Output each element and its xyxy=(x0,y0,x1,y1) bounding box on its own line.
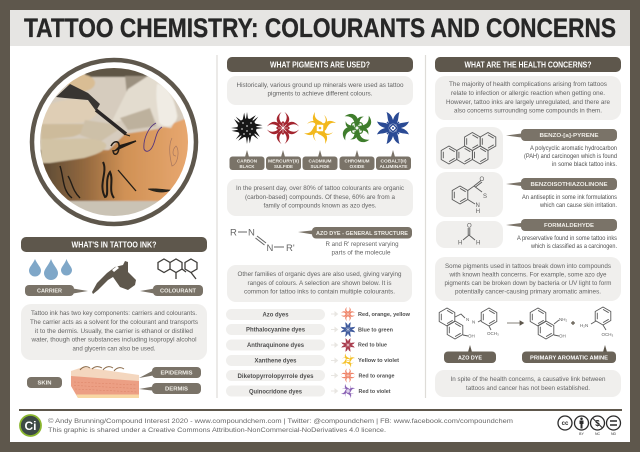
pigment labels: CADMIUM xyxy=(308,158,332,164)
photo: tattooist at work in circular frame xyxy=(32,60,196,224)
benzo-a-pyrene description: A polycyclic aromatic hydrocarbon xyxy=(530,146,617,152)
row: azo dyes: Azo dyes xyxy=(262,312,289,318)
row: quinocridone dyes: Quinocridone dyes xyxy=(249,388,302,396)
pigment labels: ALUMINATE xyxy=(380,164,408,169)
icon: tattoo machine xyxy=(92,261,136,294)
pigment labels: SULFIDE xyxy=(274,164,293,169)
skin label xyxy=(27,377,62,388)
row: quinocridone dyes: Red to violet xyxy=(358,389,391,395)
icon: creative commons licence badges xyxy=(558,416,620,436)
row: xanthene dyes: Xanthene dyes xyxy=(254,358,297,364)
icon: cadmium sulfide pigment xyxy=(304,112,336,144)
text block: ink components xyxy=(21,304,207,360)
molecule: benzisothiazolinone xyxy=(436,172,503,217)
row: xanthene dyes xyxy=(226,353,399,368)
text block: organic colourants: (carbon-based) compounds. Of these, 60% are from a xyxy=(245,195,396,201)
molecule: benzisothiazolinone: O xyxy=(480,177,484,183)
heading: what's in tattoo ink: WHAT'S IN TATTOO INK? xyxy=(72,240,157,250)
formaldehyde description: A preservative found in some tattoo inks xyxy=(517,236,617,242)
pigment labels: CHROMIUM xyxy=(344,158,370,164)
text block: health complications: also concerns surrounding some compounds in them. xyxy=(454,108,602,114)
molecule: azo dye xyxy=(439,308,499,339)
carrier label: CARRIER xyxy=(37,288,62,294)
icon: cobalt aluminate pigment xyxy=(377,112,409,144)
dermis label xyxy=(139,383,201,394)
molecule: benzo[a]pyrene xyxy=(436,127,503,169)
colourant label xyxy=(140,285,203,296)
text block: historical minerals: pigments to achieve different colours. xyxy=(268,92,373,98)
benzisothiazolinone description: which can cause skin irritation. xyxy=(539,203,617,209)
pigment labels: CARBON xyxy=(237,158,257,164)
text block: ink components: The carrier acts as a solvent for the colourant and transports xyxy=(30,320,198,326)
molecule: benzisothiazolinone: S xyxy=(483,194,487,200)
primary aromatic amine label xyxy=(522,345,616,363)
pigment labels xyxy=(230,150,411,170)
row: phthalocyanine dyes: Phthalocyanine dyes xyxy=(246,326,305,334)
text block: other organic dyes: Other families of organic dyes are also used, giving varying xyxy=(238,272,402,278)
logo: compound interest: Ci xyxy=(24,419,36,433)
molecules: breakdown products: NH₂ xyxy=(559,317,567,322)
column dividers xyxy=(217,55,426,398)
azo dye note xyxy=(326,242,398,256)
text block: azo breakdown: potentially cancer-causing primary aromatic amines. xyxy=(455,290,601,296)
molecules: breakdown products xyxy=(530,307,613,339)
molecule: azo dye: OCH₃ xyxy=(487,331,499,336)
formaldehyde label: FORMALDEHYDE xyxy=(544,223,594,229)
row: phthalocyanine dyes xyxy=(226,322,393,337)
icon: creative commons licence badges: NC xyxy=(595,432,600,436)
text block: historical minerals: Historically, various ground up minerals were used as tattoo xyxy=(236,83,404,89)
footer credits: © Andy Brunning/Compound Interest 2020 - www.compoundchem.com | Twitter: @compoundchem | FB: www.facebook.com/compoundchem xyxy=(48,417,513,425)
molecule: formaldehyde: O xyxy=(467,224,472,230)
footer rule xyxy=(19,409,622,411)
text block: ink components: water, though other substances including isopropyl alcohol xyxy=(30,338,196,344)
row: anthraquinone dyes: Red to blue xyxy=(358,342,388,348)
text block: ink components: and glycerin can also be used. xyxy=(72,346,156,352)
azo dye label xyxy=(298,227,412,238)
icon: creative commons licence badges: BY xyxy=(579,432,584,436)
azo dye general structure: R' xyxy=(286,243,295,254)
icon: colourant molecule xyxy=(158,259,197,279)
row: anthraquinone dyes xyxy=(226,338,388,352)
icon: creative commons licence badges: cc xyxy=(562,421,569,427)
colourant label: COLOURANT xyxy=(160,288,197,294)
pigment labels: MERCURY(II) xyxy=(268,158,300,164)
text block: causative link xyxy=(435,370,621,397)
benzo-a-pyrene description: in some black tattoo inks. xyxy=(552,162,617,168)
heading: what pigments are used xyxy=(227,57,413,72)
pigment labels: OXIDE xyxy=(350,164,365,169)
logo: compound interest xyxy=(20,415,41,436)
footer credits: This graphic is shared under a Creative Commons Attribution-NonCommercial-NoDerivatives 4.0 licence. xyxy=(48,427,386,434)
text block: health complications xyxy=(435,76,621,120)
benzisothiazolinone label xyxy=(506,178,617,190)
dermis label: DERMIS xyxy=(165,386,188,392)
molecules: breakdown products: H₂N xyxy=(580,323,588,328)
skin diagram xyxy=(71,367,139,398)
row: azo dyes xyxy=(226,307,410,321)
text block: health complications: However, tattoo inks are largely unregulated, and there are xyxy=(446,100,611,106)
row: phthalocyanine dyes: Blue to green xyxy=(358,328,393,334)
azo dye note: R and R' represent varying xyxy=(326,242,398,248)
heading: what are the health concerns xyxy=(435,57,621,72)
heading: what pigments are used: WHAT PIGMENTS ARE USED? xyxy=(270,60,370,70)
azo dye general structure xyxy=(230,228,295,254)
benzisothiazolinone description xyxy=(522,195,617,209)
benzo-a-pyrene description xyxy=(524,146,617,168)
primary aromatic amine label: PRIMARY AROMATIC AMINE xyxy=(530,356,608,362)
carrier label xyxy=(25,285,88,296)
epidermis label xyxy=(139,367,201,378)
text block: causative link: tattoos and cancer has not been established. xyxy=(466,386,590,392)
benzo-a-pyrene description: (PAH) and carcinogen which is found xyxy=(524,154,617,160)
skin label: SKIN xyxy=(38,380,52,386)
text block: causative link: In spite of the health concerns, a causative link between xyxy=(450,377,606,383)
row: diketopyrrolopyrrole dyes xyxy=(226,368,395,383)
formaldehyde label xyxy=(506,219,617,231)
row: diketopyrrolopyrrole dyes: Diketopyrrolopyrrole dyes xyxy=(238,373,314,380)
heading: what are the health concerns: WHAT ARE THE HEALTH CONCERNS? xyxy=(464,60,592,70)
text block: azo breakdown: Some pigments used in tattoos break down into compounds xyxy=(445,264,611,270)
row: azo dyes: Red, orange, yellow xyxy=(358,312,410,318)
icon: carbon black pigment xyxy=(229,110,265,146)
molecule: formaldehyde xyxy=(436,221,503,248)
dye family rows xyxy=(226,307,410,398)
epidermis label: EPIDERMIS xyxy=(160,370,193,376)
molecules: breakdown products: OH xyxy=(559,334,566,338)
icon: creative commons licence badges: ND xyxy=(611,432,616,436)
text block: other organic dyes: ranges of colours. A selection are shown below. It is xyxy=(248,281,392,287)
row: quinocridone dyes xyxy=(226,384,391,398)
azo dye general structure: N xyxy=(248,228,255,238)
text block: health complications: The majority of health complications arising from tattoos xyxy=(449,82,607,88)
azo dye label: AZO DYE xyxy=(458,356,482,362)
molecule: azo dye: OH xyxy=(468,334,475,338)
row: diketopyrrolopyrrole dyes: Red to orange xyxy=(358,374,395,380)
azo dye general structure: N xyxy=(266,243,274,254)
benzo-a-pyrene label xyxy=(506,129,617,141)
icon: mercury sulfide pigment xyxy=(267,112,299,144)
pigment labels: BLACK xyxy=(240,164,255,169)
reaction arrow xyxy=(507,321,524,325)
benzisothiazolinone label: BENZOISOTHIAZOLINONE xyxy=(530,182,608,188)
footer credits xyxy=(48,417,513,434)
benzisothiazolinone description: An antiseptic in some ink formulations xyxy=(522,195,617,201)
formaldehyde description: which is classified as a carcinogen. xyxy=(530,244,617,250)
molecule: formaldehyde: H xyxy=(476,240,480,246)
pigment labels: COBALT(II) xyxy=(380,158,407,164)
benzo-a-pyrene label: BENZO-[a]-PYRENE xyxy=(540,133,599,139)
icon: chromium oxide pigment xyxy=(339,110,375,146)
text block: other organic dyes: common for tattoo inks to contain multiple colourants. xyxy=(244,290,395,296)
molecules: breakdown products: OCH₃ xyxy=(602,332,613,337)
text block: ink components: Tattoo ink has two key components: carriers and colourants. xyxy=(31,311,197,317)
icon: carrier drops xyxy=(29,259,72,280)
molecule: formaldehyde: H xyxy=(458,240,462,246)
text block: health complications: relate to infection or allergic reaction when getting one. xyxy=(451,91,605,97)
text block: organic colourants xyxy=(227,179,413,216)
text block: azo breakdown: with known health concerns. For example, some azo dye xyxy=(448,272,607,278)
molecule: azo dye: N xyxy=(472,320,475,324)
formaldehyde description xyxy=(517,236,617,250)
text block: organic colourants: In the present day, over 80% of tattoo colourants are organic xyxy=(236,186,404,192)
heading: what's in tattoo ink xyxy=(21,237,207,252)
row: anthraquinone dyes: Anthraquinone dyes xyxy=(247,342,304,349)
icon: creative commons licence badges: $ xyxy=(595,419,600,428)
molecule: azo dye: N xyxy=(466,317,469,322)
azo dye general structure: R xyxy=(230,228,237,238)
text block: historical minerals xyxy=(227,76,413,105)
molecule: benzisothiazolinone: H xyxy=(476,209,480,215)
text block: organic colourants: family of compounds known as azo dyes. xyxy=(264,204,377,210)
azo dye label: AZO DYE - GENERAL STRUCTURE xyxy=(316,231,408,237)
text block: ink components: it to the dermis. Usually, the carrier is ethanol or distilled xyxy=(35,329,193,335)
text block: azo breakdown: pigments can be broken down by bacteria or UV light to form xyxy=(444,281,612,287)
molecule: benzisothiazolinone: N xyxy=(476,203,480,209)
azo dye note: parts of the molecule xyxy=(332,250,391,256)
pigment labels: SULFIDE xyxy=(310,164,330,169)
text block: azo breakdown xyxy=(435,257,621,301)
row: xanthene dyes: Yellow to violet xyxy=(358,358,399,364)
text block: other organic dyes xyxy=(227,265,412,302)
azo dye label xyxy=(444,345,496,363)
